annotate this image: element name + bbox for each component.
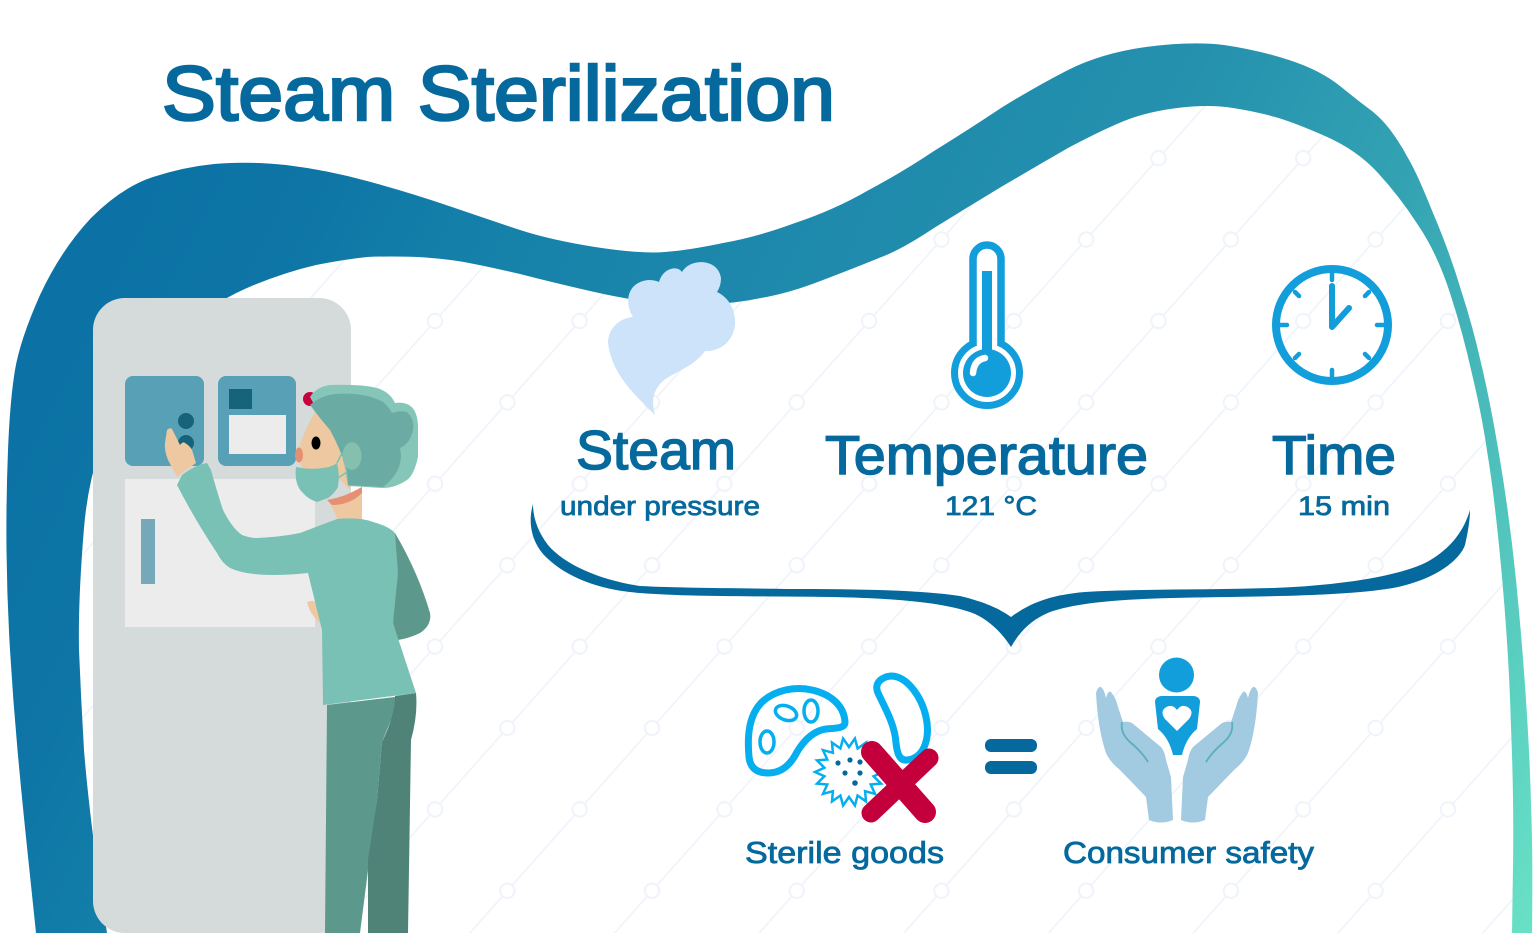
icon: hands protecting person xyxy=(1096,658,1258,822)
icon: thermometer xyxy=(954,245,1020,406)
operator figure xyxy=(165,385,430,933)
person head xyxy=(1159,658,1194,692)
label: time xyxy=(1272,424,1396,521)
label: sterile goods: Sterile goods xyxy=(745,835,944,870)
trousers xyxy=(325,693,416,933)
red cross xyxy=(871,752,929,813)
spiky microbe xyxy=(815,738,883,806)
eye xyxy=(312,436,320,450)
label: temperature: 121 °C xyxy=(945,491,1037,521)
face mask xyxy=(296,453,347,502)
ear xyxy=(342,442,362,470)
icon: sterile goods microbes xyxy=(748,676,929,813)
label: steam xyxy=(560,419,760,521)
nose xyxy=(295,448,303,462)
left hand xyxy=(1096,687,1173,822)
person body with heart xyxy=(1155,696,1200,755)
label: time: Time xyxy=(1272,424,1396,486)
right hand xyxy=(1181,687,1258,822)
display panel xyxy=(218,376,296,466)
title: Steam Sterilization xyxy=(162,51,835,137)
equals sign xyxy=(985,739,1037,774)
label: consumer safety: Consumer safety xyxy=(1063,835,1315,870)
label: steam: under pressure xyxy=(560,491,760,521)
collar xyxy=(327,487,362,505)
icon: clock xyxy=(1276,269,1388,381)
back arm xyxy=(393,533,430,640)
icon: steam cloud xyxy=(608,262,735,415)
label: steam: Steam xyxy=(576,419,736,481)
label: temperature xyxy=(825,424,1148,521)
lower hand xyxy=(307,601,322,625)
face xyxy=(298,412,358,490)
bean shaped bacterium xyxy=(748,688,845,773)
surgical cap xyxy=(310,385,418,488)
rod shaped bacterium xyxy=(877,676,927,760)
neck xyxy=(330,487,362,520)
shirt xyxy=(177,463,416,705)
curly brace xyxy=(531,504,1470,647)
machine door xyxy=(125,479,315,627)
label: temperature: Temperature xyxy=(825,424,1148,486)
red marker xyxy=(303,392,317,406)
sterilizer machine xyxy=(93,298,351,933)
label: time: 15 min xyxy=(1298,491,1390,521)
raised hand xyxy=(165,428,196,477)
control panel with buttons xyxy=(125,376,204,466)
